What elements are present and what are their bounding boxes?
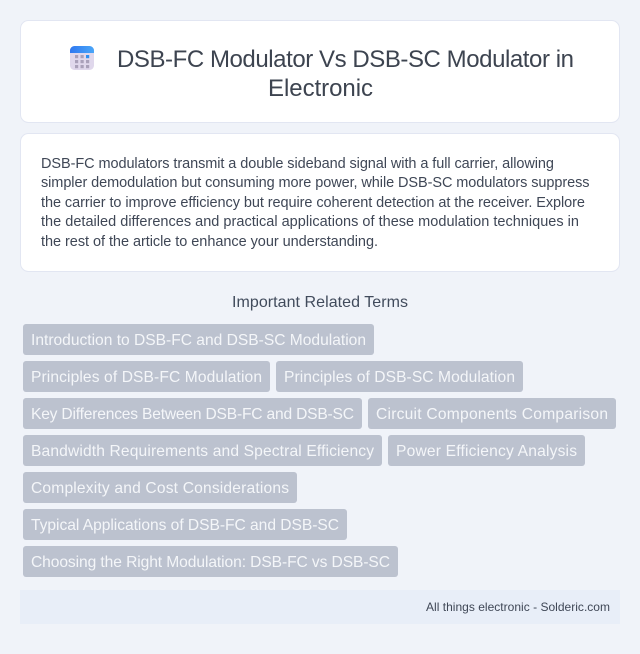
text block: summary: the carrier to improve efficiency but require coherent detection at the receiver. Explore	[41, 195, 585, 211]
chip: complexity and cost	[23, 472, 297, 503]
title: DSB-FC Modulator Vs DSB-SC Modulator in	[117, 46, 574, 73]
icon: calendar	[70, 46, 94, 70]
footer	[20, 590, 620, 624]
chip: power efficiency: Power Efficiency Analysis	[396, 443, 577, 460]
footer: All things electronic - Solderic.com	[426, 600, 610, 614]
panel: title card	[20, 20, 620, 122]
chip: typical applications: Typical Applications of DSB-FC and DSB-SC	[31, 517, 339, 534]
title: Electronic	[268, 75, 373, 102]
chip: key differences: Key Differences Between DSB-FC and DSB-SC	[31, 406, 354, 423]
chip: circuit components	[368, 398, 616, 429]
panel: related term chips	[23, 324, 616, 577]
chip: key differences	[23, 398, 362, 429]
chip: introduction	[23, 324, 374, 355]
text block: summary: simpler demodulation but consuming more power, while DSB-SC modulators suppress	[41, 175, 590, 191]
chip: principles of DSB-FC: Principles of DSB-FC Modulation	[31, 369, 262, 386]
chip: principles of DSB-SC: Principles of DSB-SC Modulation	[284, 369, 515, 386]
text block: summary: the rest of the article to enhance your understanding.	[41, 234, 378, 250]
text block: summary	[41, 156, 590, 250]
text block: summary: the detailed differences and practical applications of these modulation techniques in	[41, 214, 579, 230]
title	[117, 46, 574, 102]
text block: summary: DSB-FC modulators transmit a double sideband signal with a full carrier, allowing	[41, 156, 554, 172]
chip: typical applications	[23, 509, 347, 540]
panel: summary card	[20, 134, 620, 272]
chip: choosing modulation: Choosing the Right Modulation: DSB-FC vs DSB-SC	[31, 554, 390, 571]
chip: power efficiency	[388, 435, 585, 466]
chip: complexity and cost: Complexity and Cost Considerations	[31, 480, 289, 497]
heading: important related terms: Important Related Terms	[232, 294, 408, 311]
chip: principles of DSB-SC	[276, 361, 523, 392]
chip: choosing modulation	[23, 546, 398, 577]
chip: introduction: Introduction to DSB-FC and DSB-SC Modulation	[31, 332, 366, 349]
chip: principles of DSB-FC	[23, 361, 270, 392]
chip: bandwidth requirements: Bandwidth Requirements and Spectral Efficiency	[31, 443, 374, 460]
chip: circuit components: Circuit Components Comparison	[376, 406, 608, 423]
chip: bandwidth requirements	[23, 435, 382, 466]
